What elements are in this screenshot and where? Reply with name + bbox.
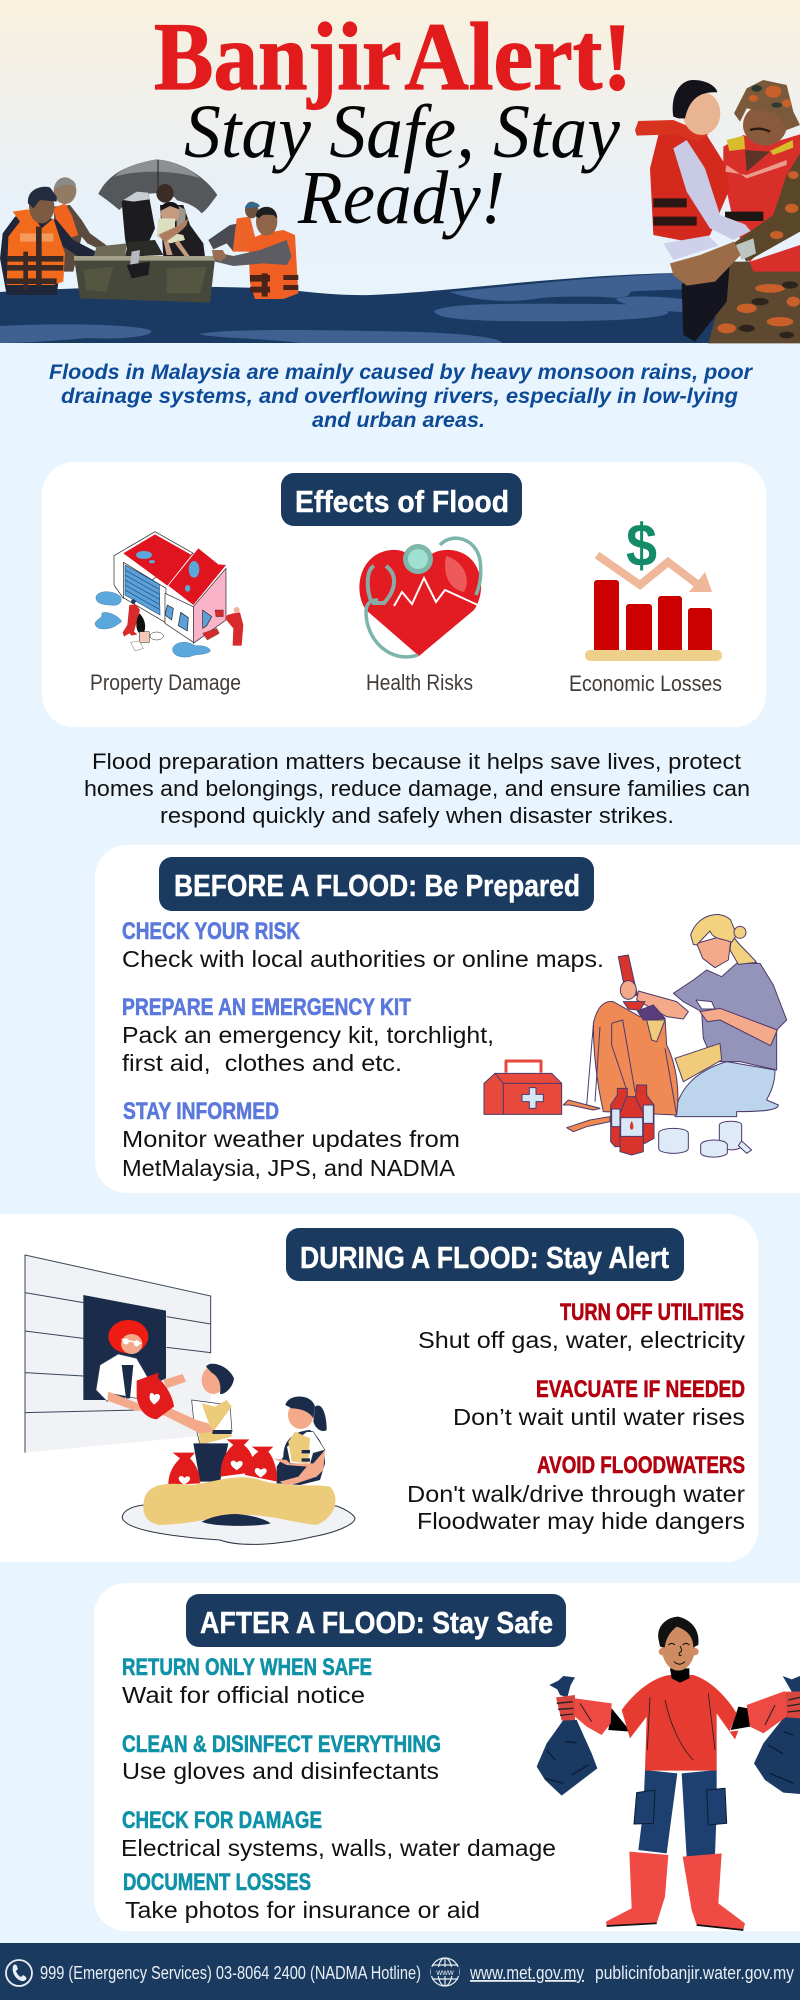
umbrella [98, 159, 217, 213]
heading: before a flood: BEFORE A FLOOD: Be Prepared [174, 868, 580, 903]
photo: rescuer carrying a child [635, 80, 800, 343]
shirt [673, 963, 787, 1070]
tip: document losses: Take photos for insurance or aid [125, 1897, 480, 1923]
rescuer vest [723, 134, 800, 272]
figure at window [225, 612, 243, 646]
text block: why preparation matters: respond quickly and safely when disaster strikes. [160, 803, 674, 828]
intro text: Floods in Malaysia are mainly caused by heavy monsoon rains, poor [49, 361, 754, 384]
aid bag held [137, 1373, 174, 1419]
icon: economic losses chart [585, 512, 722, 661]
title: Ready! [297, 156, 505, 240]
illustration: volunteers handing out aid bags [25, 1255, 355, 1544]
rescuer behind left [53, 205, 108, 272]
rescuer head and hat [743, 104, 787, 146]
text block: why preparation matters [84, 749, 750, 828]
tip: stay informed [122, 1098, 460, 1181]
woman head [108, 1320, 148, 1353]
tip: avoid floodwaters: Don't walk/drive through water [407, 1481, 745, 1507]
tip: avoid floodwaters: AVOID FLOODWATERS [537, 1452, 745, 1479]
illustration: man holding rubbish bags [537, 1617, 800, 1930]
boat [74, 257, 215, 303]
header banner [0, 0, 800, 343]
man [192, 1400, 232, 1445]
tip: check for damage: Electrical systems, walls, water damage [121, 1835, 556, 1861]
rescuer sleeve camouflage [733, 153, 800, 262]
shirt [622, 1675, 738, 1771]
heading: before a flood [159, 857, 594, 911]
floor mat [122, 1505, 355, 1544]
left bag [537, 1676, 597, 1796]
tip: avoid floodwaters: Floodwater may hide dangers [417, 1508, 745, 1534]
text block: why preparation matters: homes and belongings, reduce damage, and ensure families can [84, 776, 750, 801]
rescuer front left [0, 213, 99, 295]
tip: return only when safe [122, 1654, 372, 1708]
outboard motor [122, 192, 155, 278]
child life jacket [650, 130, 730, 243]
figure with sludge [123, 604, 140, 637]
rescuer hand [670, 242, 741, 286]
label: economic losses: Economic Losses [569, 671, 722, 696]
heading: after a flood: AFTER A FLOOD: Stay Safe [200, 1605, 553, 1640]
tip: prepare an emergency kit: first aid, clothes and etc. [122, 1050, 402, 1076]
tip: evacuate if needed [453, 1376, 745, 1430]
website links [469, 1963, 794, 1983]
tip: clean and disinfect everything: CLEAN & DISINFECT EVERYTHING [122, 1731, 441, 1758]
right bag [754, 1676, 800, 1794]
panel: effects of flood [42, 462, 766, 727]
icon: globe [431, 1958, 459, 1986]
hair front [691, 915, 737, 945]
title: Stay Safe, Stay [184, 90, 620, 174]
icon: economic losses chart: $ [626, 512, 657, 579]
clothes [675, 1043, 722, 1082]
windows [165, 605, 173, 620]
flood water [0, 273, 800, 343]
outline and walls [114, 532, 193, 598]
head [662, 1624, 695, 1671]
tip: prepare an emergency kit: Pack an emergency kit, torchlight, [122, 1022, 494, 1048]
heading: during a flood [286, 1228, 684, 1281]
intro text [49, 361, 754, 432]
face [697, 933, 732, 968]
arms [608, 1708, 631, 1732]
panel: during a flood [0, 1214, 758, 1562]
icon: phone [6, 1960, 32, 1986]
child trousers [682, 262, 730, 342]
photo: rescuers pushing a boat [0, 159, 298, 303]
heading: effects of flood [281, 473, 522, 526]
label: health risks: Health Risks [366, 670, 473, 695]
tip: check for damage: CHECK FOR DAMAGE [122, 1807, 322, 1834]
passengers [160, 205, 205, 257]
sandbags [143, 1477, 335, 1525]
tip: evacuate if needed: Don’t wait until water rises [453, 1404, 745, 1430]
legs [638, 1770, 677, 1853]
heading: during a flood: DURING A FLOOD: Stay Alert [300, 1240, 669, 1275]
tip: turn off utilities: TURN OFF UTILITIES [560, 1299, 744, 1326]
torch [618, 955, 637, 998]
tip: prepare an emergency kit: PREPARE AN EMERGENCY KIT [122, 994, 411, 1021]
skirt [675, 1062, 778, 1117]
tip: check your risk [122, 918, 604, 972]
heading: effects of flood: Effects of Flood [295, 484, 509, 519]
icon: property damage house [95, 532, 243, 657]
collar [670, 1668, 689, 1683]
roof [123, 534, 192, 586]
rescuer front right [248, 230, 298, 299]
label: property damage: Property Damage [90, 670, 241, 695]
arm with torch [637, 991, 688, 1019]
rescuer behind right [208, 222, 253, 252]
woman coat [96, 1354, 148, 1402]
footer bar [0, 1943, 800, 2000]
wall [25, 1255, 211, 1453]
child shirt and sleeve [673, 140, 751, 240]
tip: turn off utilities [418, 1299, 746, 1353]
emergency numbers: 999 (Emergency Services) 03-8064 2400 (NADMA Hotline) [40, 1963, 421, 1983]
girl [277, 1430, 325, 1485]
title [154, 3, 632, 240]
jars and bandages [659, 1128, 688, 1153]
tip: evacuate if needed: EVACUATE IF NEEDED [536, 1376, 745, 1403]
tip: return only when safe: RETURN ONLY WHEN SAFE [122, 1654, 372, 1681]
bottles [611, 1088, 630, 1147]
window [83, 1295, 166, 1400]
icon: health risks heart [359, 538, 481, 657]
hair back [730, 935, 757, 964]
title: Banjir Alert! [154, 3, 632, 110]
tip: check for damage [121, 1807, 556, 1861]
tip: clean and disinfect everything: Use gloves and disinfectants [122, 1758, 439, 1784]
backpack [593, 1001, 678, 1115]
intro text: drainage systems, and overflowing rivers, especially in low-lying [61, 385, 738, 408]
panel: after a flood [94, 1583, 800, 1931]
first aid kit [506, 1061, 541, 1073]
child head [683, 92, 720, 135]
woman arms [107, 1392, 144, 1411]
aid bags on floor [168, 1439, 277, 1485]
tip: document losses: DOCUMENT LOSSES [123, 1869, 311, 1896]
panel: before a flood [95, 845, 800, 1193]
website links: www.met.gov.my [469, 1963, 584, 1983]
tip: prepare an emergency kit [122, 994, 494, 1076]
heading: after a flood [186, 1594, 566, 1647]
text block: why preparation matters: Flood preparation matters because it helps save lives, protect [92, 749, 741, 774]
puddles [96, 592, 121, 605]
illustration: woman packing an emergency kit [484, 915, 787, 1157]
boots [606, 1852, 668, 1927]
icon: globe: www [435, 1968, 454, 1977]
rescuer lower body camouflage [708, 262, 800, 343]
tip: stay informed: STAY INFORMED [123, 1098, 279, 1125]
tip: check your risk: Check with local authorities or online maps. [122, 946, 604, 972]
tip: avoid floodwaters [407, 1452, 745, 1534]
tip: clean and disinfect everything [122, 1731, 441, 1784]
tip: return only when safe: Wait for official notice [122, 1682, 365, 1708]
pink wall details [203, 610, 223, 640]
intro text: and urban areas. [312, 409, 485, 432]
tip: turn off utilities: Shut off gas, water, electricity [418, 1327, 746, 1353]
tip: check your risk: CHECK YOUR RISK [122, 918, 301, 945]
tip: document losses [123, 1869, 480, 1923]
tip: stay informed: MetMalaysia, JPS, and NADMA [122, 1155, 456, 1181]
tip: stay informed: Monitor weather updates from [122, 1126, 460, 1152]
